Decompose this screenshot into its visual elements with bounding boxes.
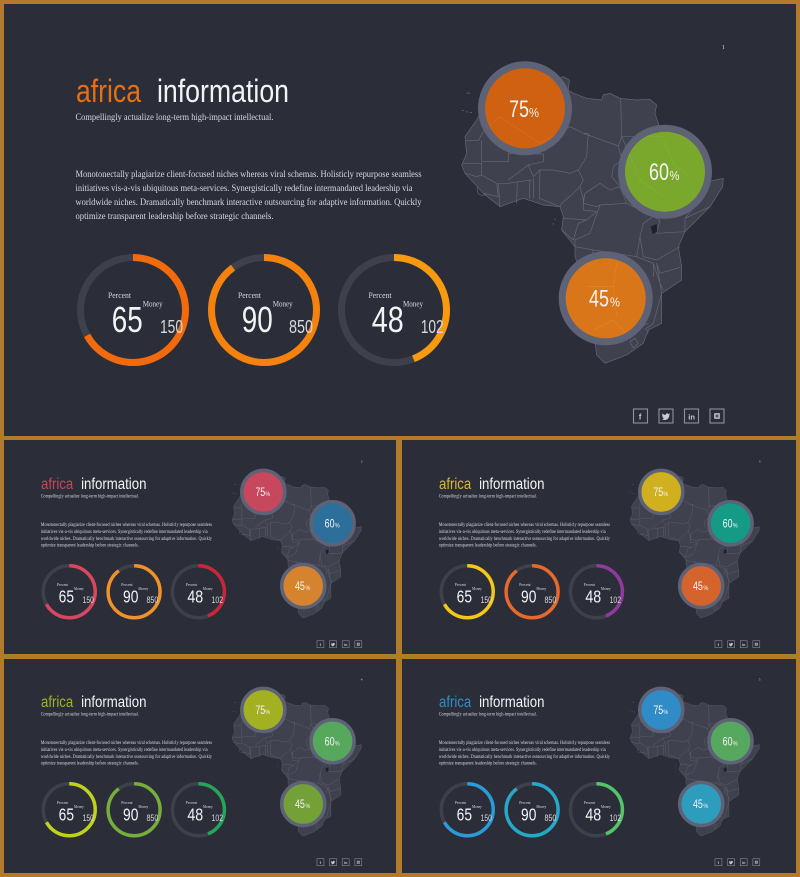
map marker: 60 percent: % (335, 522, 340, 529)
body text: optimize transparent leadership before strategic channels. (76, 211, 274, 222)
ring chart: 48: 48 (372, 299, 404, 340)
map marker: 45 percent: 45 (693, 797, 703, 811)
body text: optimize transparent leadership before strategic channels. (41, 762, 139, 767)
map marker: 75 percent (242, 470, 285, 513)
ring chart: 48: 102 (212, 595, 223, 605)
body text: Monotonectally plagiarize client-focused niches whereas viral schemas. Holisticly repurpose seamless (76, 169, 422, 180)
map marker: 60 percent (311, 502, 354, 545)
ring chart: 65: Percent (57, 582, 69, 587)
social icons: in (344, 861, 348, 865)
ring chart: 65 (80, 258, 186, 362)
ring chart: 65 (43, 784, 95, 836)
ring chart: 48: Percent (584, 800, 596, 805)
ring chart: 90: 90 (123, 805, 138, 825)
subtitle: Compellingly actualize long-term high-impact intellectual. (41, 713, 139, 718)
body text: worldwide niches. Dramatically benchmark interactive outsourcing for adaptive information. Quickly (76, 197, 422, 208)
panel: blue slide (402, 659, 796, 873)
social icons: f (639, 412, 642, 422)
ring chart: 48: Money (601, 804, 611, 809)
ring chart: 90 (108, 784, 160, 836)
ring chart: 90 (506, 784, 558, 836)
map marker: 45 percent: % (610, 295, 620, 310)
title: information (479, 694, 544, 711)
ring chart: 65: Money (74, 804, 84, 809)
ring chart: 48: 48 (187, 587, 203, 607)
subtitle: Compellingly actualize long-term high-impact intellectual. (439, 713, 537, 718)
title (41, 694, 146, 711)
body text (76, 169, 422, 222)
ring chart: 65: 150 (160, 317, 183, 337)
body text: worldwide niches. Dramatically benchmark interactive outsourcing for adaptive information. Quickly (439, 537, 611, 542)
ring chart: 90: 850 (544, 595, 556, 605)
ring chart: 90: 850 (146, 813, 158, 823)
social icons (317, 641, 362, 648)
ring chart: 48 (172, 566, 224, 618)
ring chart: 48: Percent (584, 582, 596, 587)
map marker: 45 percent: % (703, 585, 709, 592)
map of africa (630, 476, 759, 618)
ring chart: 90: Percent (238, 291, 262, 300)
page number: 2 (361, 460, 363, 464)
map marker: 45 percent: % (305, 803, 311, 810)
map marker: 60 percent (311, 720, 354, 763)
map of africa (232, 694, 361, 836)
title: africa (41, 694, 73, 711)
panel: yellow slide (402, 440, 796, 654)
social icons: in (344, 643, 348, 647)
ring chart: 90 (506, 566, 558, 618)
map marker: 60 percent: 60 (723, 516, 733, 530)
ring chart: 48: 48 (187, 805, 203, 825)
map marker: 60 percent (709, 720, 752, 763)
title (439, 476, 544, 493)
ring chart: 48: 102 (421, 317, 444, 337)
map marker: 75 percent: % (265, 709, 270, 716)
body text (439, 523, 611, 549)
map marker: 45 percent: % (305, 585, 311, 592)
subtitle: Compellingly actualize long-term high-impact intellectual. (41, 495, 139, 500)
subtitle: Compellingly actualize long-term high-impact intellectual. (76, 112, 274, 123)
map marker: 45 percent (680, 564, 723, 607)
map marker: 75 percent (478, 61, 572, 156)
map marker: 60 percent: % (733, 522, 738, 529)
panel: lime slide (4, 659, 396, 873)
page number: 5 (759, 678, 761, 682)
map marker: 60 percent (709, 502, 752, 545)
ring chart: 65 (441, 566, 493, 618)
title (76, 73, 289, 109)
ring chart: 90: 90 (521, 805, 536, 825)
ring chart: 65 (43, 566, 95, 618)
ring chart: 65: 150 (83, 813, 94, 823)
body text: optimize transparent leadership before strategic channels. (41, 544, 139, 549)
body text: Monotonectally plagiarize client-focused niches whereas viral schemas. Holisticly repurpose seamless (41, 523, 212, 528)
ring chart: 65: Money (143, 300, 163, 309)
map marker: 75 percent: % (663, 709, 668, 716)
body text: initiatives vis-a-vis ubiquitous meta-services. Synergistically redefine intermandated leadership via (439, 530, 606, 535)
map marker: 60 percent: 60 (649, 159, 669, 186)
map marker: 75 percent (640, 688, 683, 731)
social icons: f (320, 860, 322, 865)
ring chart: 65: 65 (59, 587, 74, 607)
body text (439, 741, 611, 767)
title: information (81, 476, 146, 493)
social icons: f (718, 860, 720, 865)
body text: optimize transparent leadership before strategic channels. (439, 544, 537, 549)
ring chart: 65: Percent (108, 291, 132, 300)
social icons: in (688, 412, 695, 422)
ring chart: 90: Money (138, 586, 148, 591)
ring chart: 48: 102 (212, 813, 223, 823)
ring chart: 65: 65 (112, 299, 143, 340)
ring chart: 90: 850 (146, 595, 158, 605)
page number: 4 (361, 678, 363, 682)
ring chart: 65: Money (472, 586, 482, 591)
body text: initiatives vis-a-vis ubiquitous meta-services. Synergistically redefine intermandated leadership via (76, 183, 413, 194)
ring chart: 65 (441, 784, 493, 836)
ring chart: 90: Money (138, 804, 148, 809)
ring chart: 48: Money (403, 300, 423, 309)
ring chart: 65: Money (472, 804, 482, 809)
title: africa (439, 476, 471, 493)
ring chart: 90: Percent (121, 582, 133, 587)
ring chart: 90 (212, 258, 316, 362)
map marker: 75 percent: % (663, 491, 668, 498)
ring chart: 65: Percent (455, 582, 467, 587)
ring chart: 65: 65 (457, 587, 472, 607)
map marker: 75 percent: 75 (653, 703, 664, 717)
social icons: f (320, 642, 322, 647)
map marker: 75 percent (242, 688, 285, 731)
map marker: 45 percent: % (703, 803, 709, 810)
social icons: in (742, 643, 746, 647)
social icons (715, 641, 760, 648)
social icons (634, 409, 724, 423)
map marker: 45 percent (282, 564, 325, 607)
map marker: 45 percent: 45 (589, 286, 609, 313)
ring chart: 48: Money (601, 586, 611, 591)
ring chart: 48: 102 (610, 595, 621, 605)
ring chart: 90: 850 (544, 813, 556, 823)
map marker: 60 percent: 60 (325, 734, 335, 748)
title: africa (41, 476, 73, 493)
ring chart: 48: Percent (186, 582, 198, 587)
map marker: 45 percent: 45 (295, 579, 305, 593)
ring chart: 65: 65 (457, 805, 472, 825)
body text: worldwide niches. Dramatically benchmark interactive outsourcing for adaptive information. Quickly (41, 537, 213, 542)
title: africa (76, 73, 141, 109)
ring chart: 65: 150 (481, 813, 492, 823)
map marker: 45 percent: 45 (295, 797, 305, 811)
ring chart: 90 (108, 566, 160, 618)
map marker: 60 percent: % (733, 740, 738, 747)
body text: Monotonectally plagiarize client-focused niches whereas viral schemas. Holisticly repurpose seamless (41, 741, 212, 746)
map marker: 45 percent (558, 251, 653, 346)
title: africa (439, 694, 471, 711)
ring chart: 65: 150 (83, 595, 94, 605)
map of africa (462, 77, 723, 363)
ring chart: 90: 850 (289, 317, 313, 337)
page number: 1 (722, 45, 725, 51)
ring chart: 48: Money (203, 586, 213, 591)
map marker: 60 percent: 60 (325, 516, 335, 530)
body text: Monotonectally plagiarize client-focused niches whereas viral schemas. Holisticly repurpose seamless (439, 741, 610, 746)
body text (41, 741, 213, 767)
ring chart: 65: Money (74, 586, 84, 591)
social icons: f (718, 642, 720, 647)
subtitle: Compellingly actualize long-term high-impact intellectual. (439, 495, 537, 500)
ring chart: 48 (342, 258, 446, 362)
title: information (157, 73, 289, 109)
map marker: 60 percent: 60 (723, 734, 733, 748)
ring chart: 65: 65 (59, 805, 74, 825)
map marker: 75 percent: 75 (255, 703, 266, 717)
ring chart: 48: 48 (585, 587, 601, 607)
map marker: 45 percent (680, 782, 723, 825)
ring chart: 48 (570, 566, 622, 618)
panel: main dark orange slide (4, 4, 796, 436)
social icons (317, 859, 362, 866)
map marker: 75 percent: % (265, 491, 270, 498)
ring chart: 90: Percent (519, 582, 531, 587)
title: information (479, 476, 544, 493)
title: information (81, 694, 146, 711)
title (41, 476, 146, 493)
ring chart: 48 (172, 784, 224, 836)
ring chart: 90: 90 (242, 299, 273, 340)
map marker: 60 percent: % (335, 740, 340, 747)
ring chart: 90: 90 (123, 587, 138, 607)
body text: optimize transparent leadership before strategic channels. (439, 762, 537, 767)
body text: initiatives vis-a-vis ubiquitous meta-services. Synergistically redefine intermandated leadership via (41, 748, 208, 753)
ring chart: 90: Money (536, 804, 546, 809)
body text (41, 523, 213, 549)
social icons (715, 859, 760, 866)
ring chart: 90: 90 (521, 587, 536, 607)
ring chart: 65: Percent (57, 800, 69, 805)
body text: worldwide niches. Dramatically benchmark interactive outsourcing for adaptive information. Quickly (439, 755, 611, 760)
body text: Monotonectally plagiarize client-focused niches whereas viral schemas. Holisticly repurpose seamless (439, 523, 610, 528)
map marker: 75 percent (640, 470, 683, 513)
body text: initiatives vis-a-vis ubiquitous meta-services. Synergistically redefine intermandated leadership via (439, 748, 606, 753)
ring chart: 48: 48 (585, 805, 601, 825)
ring chart: 65: Percent (455, 800, 467, 805)
ring chart: 90: Percent (519, 800, 531, 805)
body text: worldwide niches. Dramatically benchmark interactive outsourcing for adaptive information. Quickly (41, 755, 213, 760)
map marker: 75 percent: 75 (255, 485, 266, 499)
ring chart: 48: Percent (186, 800, 198, 805)
ring chart: 48 (570, 784, 622, 836)
ring chart: 90: Money (536, 586, 546, 591)
map marker: 75 percent: % (529, 105, 539, 120)
map marker: 60 percent: % (670, 168, 680, 183)
map marker: 45 percent: 45 (693, 579, 703, 593)
map of africa (232, 476, 361, 618)
ring chart: 90: Money (273, 300, 293, 309)
ring chart: 90: Percent (121, 800, 133, 805)
ring chart: 65: 150 (481, 595, 492, 605)
social icons: in (742, 861, 746, 865)
map marker: 75 percent: 75 (509, 96, 529, 123)
ring chart: 48: Percent (368, 291, 392, 300)
map marker: 60 percent (618, 124, 712, 219)
map marker: 45 percent (282, 782, 325, 825)
page number: 3 (759, 460, 761, 464)
body text: initiatives vis-a-vis ubiquitous meta-services. Synergistically redefine intermandated leadership via (41, 530, 208, 535)
map of africa (630, 694, 759, 836)
panel: red slide (4, 440, 396, 654)
map marker: 75 percent: 75 (653, 485, 664, 499)
ring chart: 48: 102 (610, 813, 621, 823)
title (439, 694, 544, 711)
ring chart: 48: Money (203, 804, 213, 809)
